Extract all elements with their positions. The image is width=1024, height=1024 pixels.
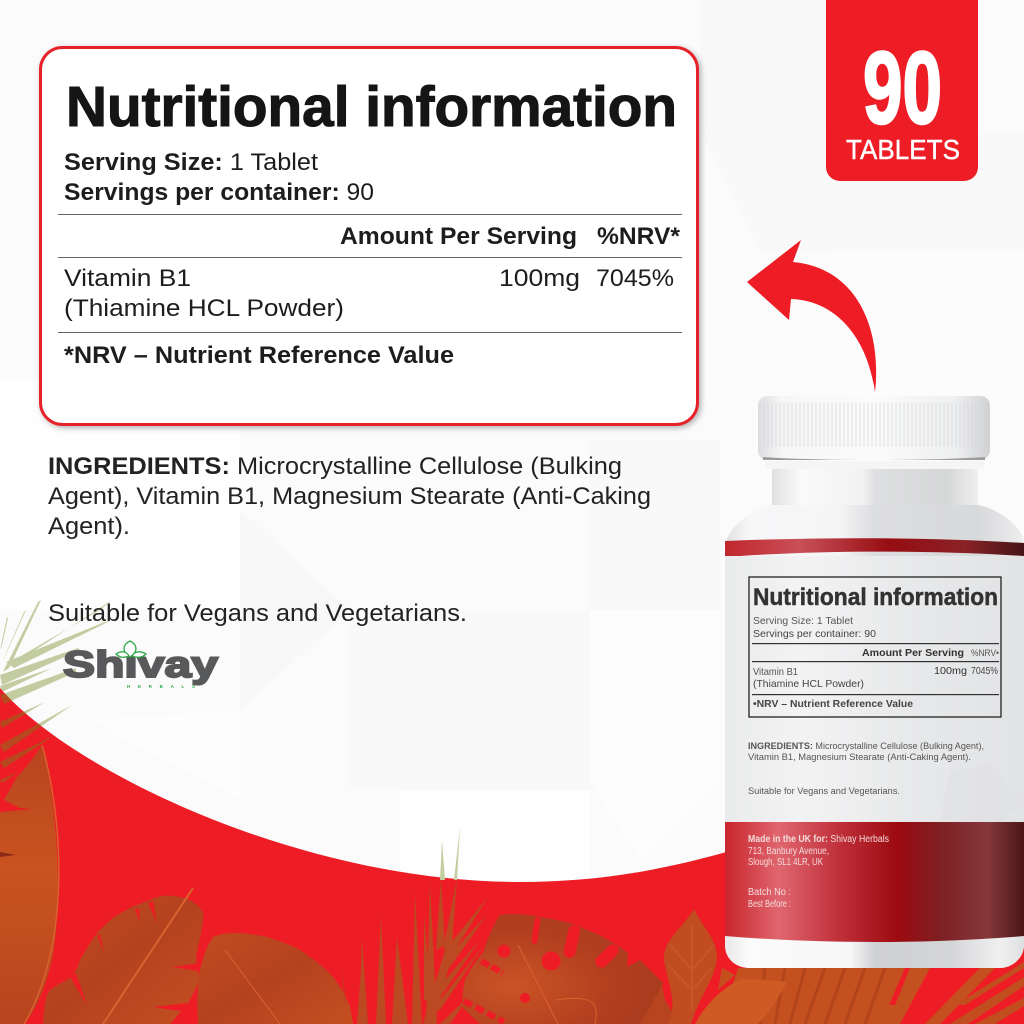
label paper (725, 556, 1024, 824)
badge: 90 tablets: 90 (863, 31, 942, 145)
logo icon (116, 641, 146, 657)
address text: Batch No : (748, 887, 791, 898)
address text: Slough, SL1 4LR, UK (748, 857, 823, 868)
card title: Nutritional information (66, 75, 677, 139)
label ingredients: Vitamin B1, Magnesium Stearate (Anti-Caking Agent). (748, 752, 971, 762)
label ingredients (748, 741, 984, 796)
logo: Shivay (63, 644, 219, 685)
palm fronds top left (0, 600, 112, 752)
table: %NRV* (597, 223, 680, 250)
bottle body (725, 505, 1024, 968)
bottle cap (758, 396, 990, 469)
nutrition card (40, 48, 698, 424)
address text: 713, Banbury Avenue, (748, 846, 829, 857)
serving details: Servings per container: 90 (64, 179, 374, 206)
front orange leaf (695, 978, 787, 1024)
ingredients text: Agent). (48, 513, 130, 540)
table: *NRV – Nutrient Reference Value (64, 342, 454, 369)
monstera leaf (463, 914, 663, 1024)
label nutrition box: Nutritional information (753, 584, 998, 611)
label nutrition box: Serving Size: 1 Tablet (753, 615, 853, 627)
center-left banana leaf (43, 888, 203, 1024)
table: (Thiamine HCL Powder) (64, 295, 344, 322)
address text: Best Before : (748, 899, 791, 910)
lower right fan (695, 962, 1024, 1024)
left large leaf (0, 693, 60, 1024)
label nutrition box: 100mg (934, 665, 967, 677)
bottle (725, 396, 1024, 968)
palm tips olive (440, 827, 460, 880)
logo: HERBALS (127, 684, 195, 689)
round leaf (197, 933, 353, 1024)
suitability note: Suitable for Vegans and Vegetarians. (48, 600, 467, 627)
red swoosh (0, 688, 1024, 1024)
bottle base (725, 930, 1024, 968)
ingredients text: INGREDIENTS: Microcrystalline Cellulose (Bulking (48, 453, 622, 480)
serving details: Serving Size: 1 Tablet (64, 149, 318, 176)
badge: 90 tablets: TABLETS (846, 134, 960, 165)
label nutrition box: Amount Per Serving (862, 647, 964, 659)
label ingredients: INGREDIENTS: Microcrystalline Cellulose (Bulking Agent), (748, 741, 984, 751)
leaves beside bottle (640, 909, 717, 1024)
ingredients text: Agent), Vitamin B1, Magnesium Stearate (Anti-Caking (48, 483, 651, 510)
table: Amount Per Serving (340, 223, 577, 250)
table: 100mg (499, 265, 580, 292)
ingredients text (48, 453, 651, 540)
bottle neck (772, 466, 978, 508)
label nutrition box (749, 577, 1001, 717)
foliage (0, 668, 1024, 1024)
address text: Made in the UK for: Shivay Herbals (748, 834, 889, 845)
badge: 90 tablets (826, 0, 978, 181)
arrow (747, 240, 876, 392)
label ingredients: Suitable for Vegans and Vegetarians. (748, 786, 900, 796)
label nutrition box: 7045% (971, 666, 998, 677)
table (58, 214, 682, 369)
label nutrition box: %NRV• (971, 648, 999, 658)
address text (748, 834, 889, 910)
label nutrition box: (Thiamine HCL Powder) (753, 678, 864, 690)
palm stems (357, 878, 488, 1024)
lower label band (725, 822, 1024, 942)
logo (63, 641, 219, 689)
serving details (64, 149, 374, 206)
label nutrition box: Servings per container: 90 (753, 628, 876, 640)
label nutrition box: •NRV – Nutrient Reference Value (753, 698, 913, 710)
table: Vitamin B1 (64, 265, 191, 292)
table: 7045% (596, 265, 674, 292)
top label band (725, 538, 1024, 557)
label nutrition box: Vitamin B1 (753, 666, 798, 678)
